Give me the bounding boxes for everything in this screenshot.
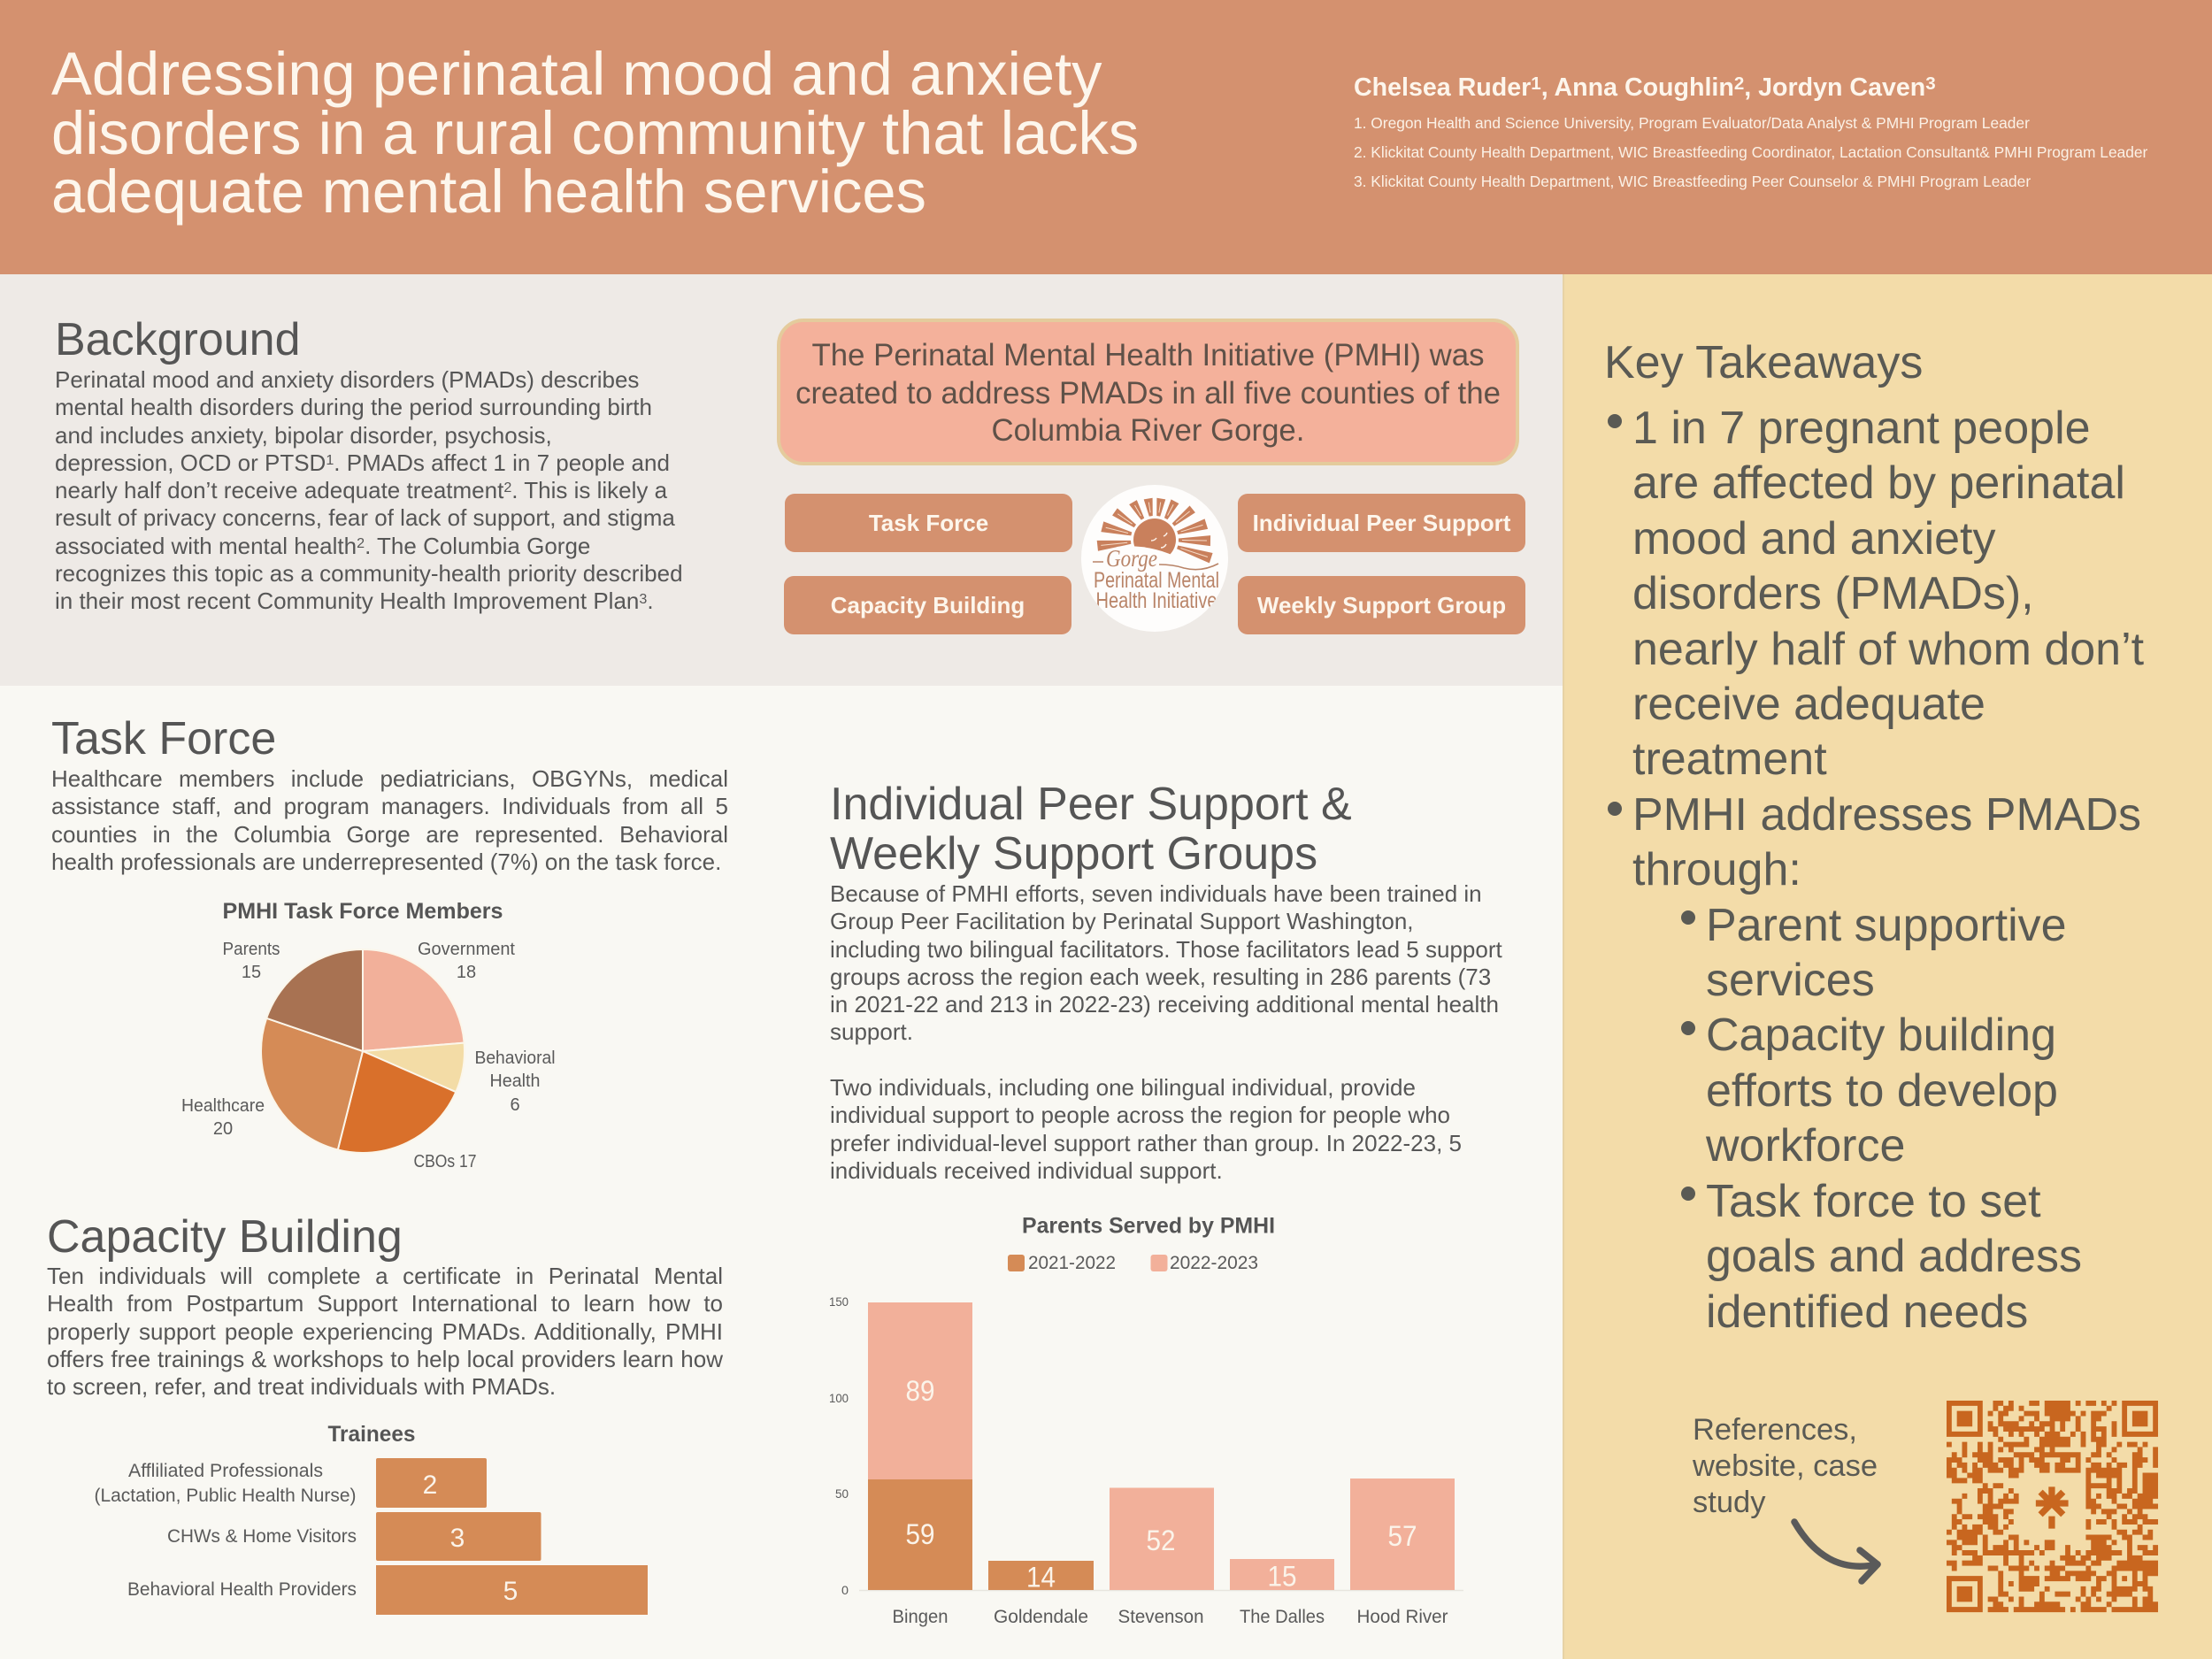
affiliations (1354, 114, 2147, 190)
QR centre asterisk (2036, 1486, 2069, 1529)
y axis labels: 100 (829, 1391, 849, 1405)
takeaways list: mood and anxiety (1632, 513, 1996, 565)
background text: mental health disorders during the period surrounding birth (55, 394, 652, 420)
legend: 2021-2022 (1028, 1253, 1116, 1273)
capacity building text: offers free trainings & workshops to help local providers learn how (47, 1346, 723, 1372)
capacity building text: properly support people experiencing PMADs. Additionally, PMHI (47, 1318, 723, 1345)
category labels: Hood River (1357, 1607, 1448, 1627)
trainee labels: Affliliated Professionals (128, 1461, 323, 1481)
legend: 2022-2023 (1170, 1253, 1258, 1273)
trainees title: Trainees (327, 1422, 416, 1447)
stacked bar chart: parents served by PMHI (829, 1214, 1463, 1627)
capacity building text: Health from Postpartum Support International to learn how to (47, 1290, 723, 1317)
panel: background (0, 274, 1563, 686)
bar values: 52 (1147, 1525, 1175, 1556)
peer support text (830, 880, 1502, 1184)
arrow to QR code (1794, 1522, 1878, 1581)
takeaways list: Parent supportive (1706, 900, 2067, 951)
takeaways list: identified needs (1706, 1286, 2028, 1338)
pie slices (261, 949, 465, 1153)
takeaways list: receive adequate (1632, 679, 1985, 730)
capacity building text: Ten individuals will complete a certificate in Perinatal Mental (47, 1263, 723, 1289)
y axis labels: 0 (841, 1583, 849, 1597)
takeaways list: PMHI addresses PMADs (1632, 789, 2141, 841)
affiliations: 1. Oregon Health and Science University, Program Evaluator/Data Analyst & PMHI Program Leader (1354, 114, 2030, 132)
logo: Gorge Perinatal Mental Health Initiative: Gorge (1106, 545, 1157, 572)
takeaways list: 1 in 7 pregnant people (1632, 403, 2091, 454)
title: adequate mental health services (51, 157, 926, 226)
heading: individual peer support: Weekly Support Groups (830, 828, 1317, 879)
takeaways list: workforce (1706, 1120, 1905, 1171)
parents chart title: Parents Served by PMHI (1022, 1214, 1275, 1239)
task force text: Healthcare members include pediatricians, OBGYNs, medical (51, 765, 728, 792)
task force text: assistance staff, and program managers. Individuals from all 5 (51, 793, 728, 819)
peer support text: groups across the region each week, resulting in 286 parents (73 (830, 964, 1491, 990)
peer support text: including two bilingual facilitators. Those facilitators lead 5 support (830, 936, 1502, 963)
y axis labels: 50 (835, 1486, 849, 1501)
takeaways list: Task force to set (1706, 1176, 2041, 1227)
bar values: 14 (1026, 1562, 1056, 1594)
takeaways list: through: (1632, 844, 1801, 895)
background text: result of privacy concerns, fear of lack of support, and stigma (55, 504, 675, 531)
takeaways list: Capacity building (1706, 1010, 2056, 1061)
trainee values: 3 (450, 1524, 465, 1553)
background text: Perinatal mood and anxiety disorders (PMADs) describes (55, 366, 639, 393)
pie labels: 15 (242, 963, 261, 982)
category labels (892, 1607, 1448, 1627)
takeaways list: services (1706, 955, 1875, 1006)
title: Addressing perinatal mood and anxiety (51, 40, 1102, 108)
category labels: Goldendale (994, 1607, 1088, 1627)
task force text: counties in the Columbia Gorge are represented. Behavioral (51, 821, 728, 848)
logo: Gorge Perinatal Mental Health Initiative: Perinatal Mental (1094, 568, 1219, 593)
bar chart: trainees (94, 1422, 648, 1615)
button: task force: Task Force (869, 510, 988, 536)
authors: Chelsea Ruder1, Anna Coughlin2, Jordyn Caven3 (1354, 73, 1936, 102)
pie labels: 18 (457, 963, 476, 982)
category labels: The Dalles (1240, 1607, 1325, 1627)
trainee labels: (Lactation, Public Health Nurse) (94, 1486, 356, 1506)
QR code (1947, 1403, 2158, 1609)
peer support text: Because of PMHI efforts, seven individuals have been trained in (830, 880, 1482, 907)
button: weekly support group: Weekly Support Group (1257, 592, 1506, 618)
pie chart title: PMHI Task Force Members (223, 899, 503, 924)
callout: PMHI purpose: Columbia River Gorge. (992, 413, 1304, 448)
peer support text: individual support to people across the region for people who (830, 1102, 1450, 1128)
references note: References, (1693, 1413, 1857, 1447)
takeaways list: nearly half of whom don’t (1632, 624, 2144, 675)
logo: Gorge Perinatal Mental Health Initiative (1081, 485, 1228, 632)
y axis labels: 150 (829, 1294, 849, 1309)
legend (1008, 1253, 1258, 1273)
affiliations: 2. Klickitat County Health Department, WIC Breastfeeding Coordinator, Lactation Consultant& PMHI Program Leader (1354, 143, 2147, 161)
peer support text: prefer individual-level support rather than group. In 2022-23, 5 (830, 1130, 1462, 1156)
takeaways list: are affected by perinatal (1632, 457, 2125, 509)
capacity building text: to screen, refer, and treat individuals with PMADs. (47, 1373, 556, 1400)
title: disorders in a rural community that lacks (51, 99, 1139, 166)
takeaways list: disorders (PMADs), (1632, 568, 2034, 619)
bars (868, 1302, 1455, 1590)
peer support text: in 2021-22 and 213 in 2022-23) receiving additional mental health (830, 991, 1499, 1018)
pie chart: PMHI task force members (181, 899, 556, 1171)
trainee values: 2 (423, 1471, 437, 1500)
category labels: Bingen (892, 1607, 949, 1627)
callout: PMHI purpose: The Perinatal Mental Health Initiative (PMHI) was (811, 338, 1485, 373)
takeaways list (1608, 403, 2144, 1338)
logo: Gorge Perinatal Mental Health Initiative: Health Initiative (1095, 588, 1217, 613)
peer support text: Group Peer Facilitation by Perinatal Support Washington, (830, 908, 1414, 934)
takeaways list: treatment (1632, 733, 1827, 785)
peer support text: Two individuals, including one bilingual individual, provide (830, 1074, 1416, 1101)
button: capacity building (784, 576, 1071, 634)
background text: nearly half don’t receive adequate treatment2. This is likely a (55, 477, 667, 503)
bar values: 89 (906, 1375, 934, 1407)
category labels: Stevenson (1118, 1607, 1203, 1627)
peer support text: individuals received individual support. (830, 1157, 1223, 1184)
background text: recognizes this topic as a community-health priority described (55, 560, 683, 587)
affiliations: 3. Klickitat County Health Department, WIC Breastfeeding Peer Counselor & PMHI Program Leader (1354, 173, 2031, 190)
pie labels: 6 (510, 1095, 520, 1115)
heading: capacity building: Capacity Building (47, 1211, 403, 1263)
heading: background: Background (55, 314, 301, 365)
background text: depression, OCD or PTSD1. PMADs affect 1 in 7 people and (55, 449, 670, 476)
heading: individual peer support (830, 779, 1352, 879)
button: individual peer support: Individual Peer Support (1253, 510, 1510, 536)
pie labels: CBOs 17 (414, 1152, 476, 1171)
bar values: 57 (1387, 1520, 1417, 1552)
references note (1693, 1413, 1878, 1519)
peer support text: support. (830, 1018, 913, 1045)
bar values: 59 (906, 1518, 934, 1550)
pie labels: Behavioral (474, 1048, 556, 1068)
task force text (51, 765, 728, 875)
background text: associated with mental health2. The Columbia Gorge (55, 533, 590, 559)
pie labels: Parents (223, 940, 280, 959)
panel: key takeaways (1563, 274, 2212, 1659)
trainee bars (376, 1458, 648, 1615)
background text: in their most recent Community Health Improvement Plan3. (55, 588, 654, 614)
references note: study (1693, 1486, 1765, 1519)
pie labels (181, 940, 556, 1171)
heading: task force: Task Force (51, 713, 276, 764)
button: individual peer support (1238, 494, 1525, 552)
takeaways list: efforts to develop (1706, 1065, 2058, 1117)
button: weekly support group (1238, 576, 1525, 634)
takeaways list: goals and address (1706, 1231, 2082, 1282)
references note: website, case (1693, 1449, 1878, 1483)
pie labels: Healthcare (181, 1096, 265, 1116)
trainee labels (94, 1461, 357, 1600)
y axis labels (829, 1294, 849, 1597)
header band (0, 0, 2212, 274)
pie labels: Health (490, 1071, 540, 1091)
callout: PMHI purpose (777, 319, 1519, 465)
button: capacity building: Capacity Building (831, 592, 1025, 618)
heading: individual peer support: Individual Peer Support & (830, 779, 1352, 830)
background text (55, 366, 683, 614)
heading: key takeaways: Key Takeaways (1604, 337, 1923, 388)
bar values: 15 (1267, 1561, 1297, 1593)
trainee values (423, 1471, 518, 1606)
task force text: health professionals are underrepresented (7%) on the task force. (51, 849, 721, 875)
callout: PMHI purpose: created to address PMADs in all five counties of the (795, 375, 1501, 411)
trainee labels: Behavioral Health Providers (127, 1579, 357, 1600)
button: task force (785, 494, 1072, 552)
capacity building text (47, 1263, 724, 1400)
trainee values: 5 (503, 1577, 518, 1606)
pie labels: Government (418, 940, 515, 959)
trainee labels: CHWs & Home Visitors (167, 1526, 357, 1547)
background text: and includes anxiety, bipolar disorder, psychosis, (55, 422, 552, 449)
bar values (906, 1375, 1417, 1594)
pie labels: 20 (213, 1119, 233, 1139)
title (51, 40, 1139, 226)
